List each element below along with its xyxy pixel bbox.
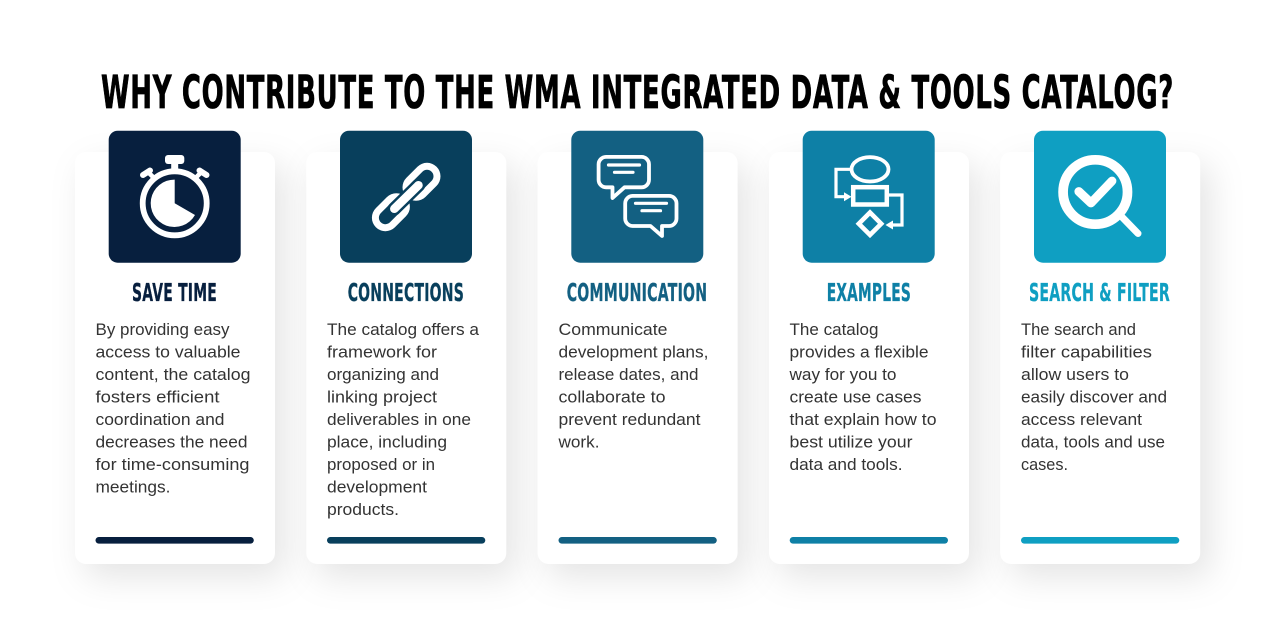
accent bar [1021, 537, 1179, 544]
body text [327, 320, 480, 519]
card background [1000, 152, 1200, 564]
accent bar [327, 537, 485, 544]
heading: CONNECTIONS [348, 278, 464, 307]
heading: COMMUNICATION [567, 278, 707, 307]
body text: access to valuable [96, 342, 240, 362]
body text: content, the catalog [96, 365, 250, 384]
panel: examples [769, 131, 969, 564]
icon: stopwatch [109, 131, 241, 263]
body text: prevent redundant [558, 410, 701, 429]
body text: By providing easy [96, 320, 230, 339]
body text: Communicate [558, 320, 668, 339]
body text: fosters efficient [96, 388, 220, 406]
accent bar [96, 537, 254, 544]
body text: The catalog [790, 320, 878, 339]
panel: connections [306, 131, 506, 564]
body text: organizing and [327, 365, 439, 384]
heading: SAVE TIME [132, 278, 217, 307]
body text: for time-consuming [96, 455, 250, 474]
body text: release dates, and [558, 365, 698, 384]
body text: The catalog offers a [327, 320, 480, 339]
body text: collaborate to [558, 388, 666, 406]
icon: flowchart [803, 131, 935, 263]
body text: create use cases [790, 388, 922, 406]
body text: decreases the need [96, 432, 248, 452]
body text: that explain how to [790, 410, 936, 429]
body text: cases. [1021, 455, 1068, 474]
heading: SEARCH & FILTER [1029, 278, 1170, 307]
card background [306, 152, 506, 564]
body text: data and tools. [790, 455, 902, 474]
body text: products. [327, 500, 399, 519]
panel: search and filter [1000, 131, 1200, 564]
accent bar [790, 537, 948, 544]
body text: provides a flexible [790, 342, 928, 362]
body text: proposed or in [327, 455, 435, 474]
body text: access relevant [1021, 410, 1142, 429]
body text: development [327, 478, 427, 496]
body text: linking project [327, 388, 437, 406]
body text [788, 320, 936, 474]
body text: coordination and [96, 410, 224, 429]
body text: filter capabilities [1021, 342, 1152, 362]
card background [538, 152, 738, 564]
body text [96, 320, 250, 496]
heading: EXAMPLES [827, 278, 911, 307]
card background [75, 152, 275, 564]
body text: best utilize your [790, 432, 913, 452]
icon: chain link [340, 131, 472, 263]
body text [557, 320, 708, 452]
body text: way for you to [788, 365, 896, 384]
body text [1021, 320, 1167, 474]
body text: development plans, [558, 342, 708, 362]
panel: communication [538, 131, 738, 564]
icon: speech bubbles [571, 131, 703, 263]
body text: data, tools and use [1021, 432, 1165, 452]
card background [769, 152, 969, 564]
body text: framework for [327, 342, 438, 362]
panel: save time [75, 131, 275, 564]
body text: easily discover and [1021, 388, 1167, 406]
icon: magnifier with check [1034, 131, 1166, 263]
body text: allow users to [1021, 365, 1129, 384]
body text: meetings. [96, 478, 170, 496]
body text: deliverables in one [327, 410, 471, 429]
body text: The search and [1021, 320, 1136, 339]
accent bar [558, 537, 717, 544]
body text: place, including [327, 432, 447, 452]
body text: work. [557, 432, 600, 452]
